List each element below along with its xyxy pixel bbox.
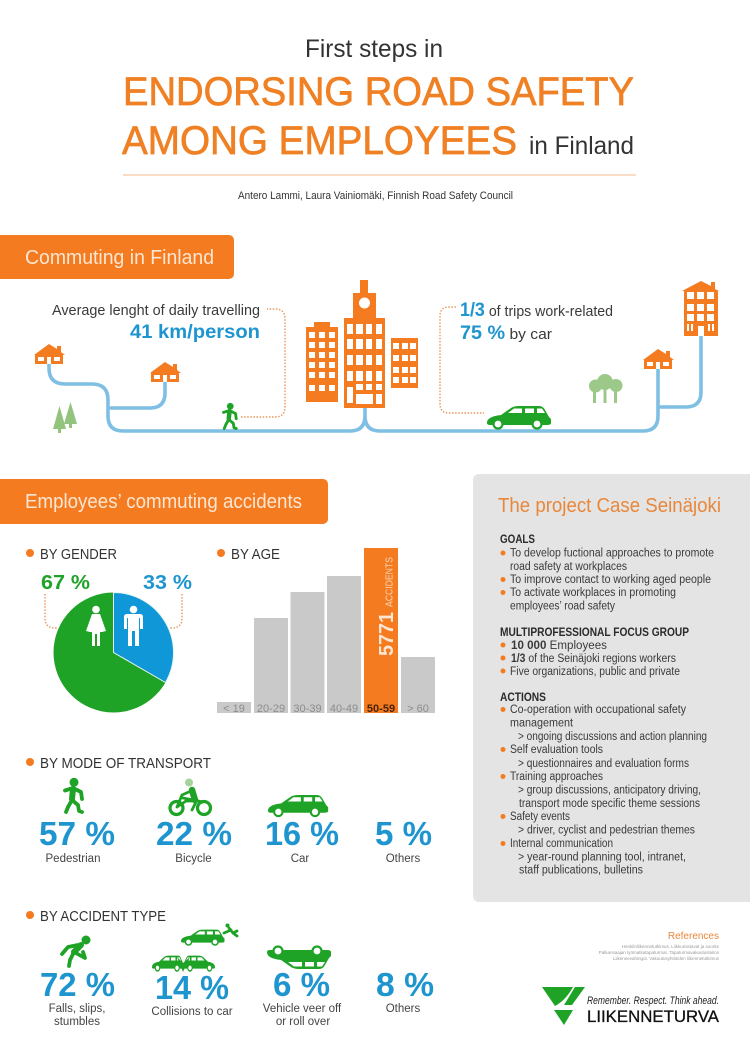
actions: > ongoing discussions and action planning (518, 731, 707, 743)
pie chart: gender (54, 592, 174, 712)
heading: by gender: BY GENDER (40, 546, 117, 563)
actions: ACTIONS (500, 692, 546, 704)
stat: falls: 72 % (40, 966, 115, 1003)
actions: management (510, 718, 574, 730)
title (122, 35, 634, 163)
icon: car on road (487, 406, 551, 428)
text: average length of daily travelling: Average lenght of daily travelling (52, 302, 260, 319)
bar chart: by age: 5771 (376, 612, 398, 656)
actions: > group discussions, anticipatory driving, (518, 784, 701, 796)
heading: by age: BY AGE (231, 546, 280, 563)
goals: To activate workplaces in promoting (510, 587, 676, 599)
stat: car: Car (291, 853, 309, 865)
stat: bicycle: 22 % (156, 815, 232, 852)
bar chart: by age: 20-29 (257, 703, 285, 715)
icon: falling person (62, 936, 90, 966)
references: Henkilöliikennetutkimus. Liikkumistavat ja suorite (622, 944, 719, 949)
bar chart: by age: ACCIDENTS (384, 557, 396, 607)
stat: falls: Falls, slips, (49, 1003, 105, 1015)
logo: Liikenneturva (542, 987, 720, 1026)
actions: Co-operation with occupational safety (510, 704, 686, 716)
gender leaders (45, 594, 182, 628)
text: trips work-related: 75 % by car (460, 323, 552, 344)
text: average length of daily travelling: 41 km/person (130, 322, 260, 343)
icon: house 1 (34, 344, 65, 364)
focus group (500, 627, 689, 678)
goals: To improve contact to working aged people (510, 574, 711, 586)
icon: house 2 (150, 362, 181, 382)
icon: city buildings (306, 280, 418, 408)
actions: > year-round planning tool, intranet, (518, 852, 686, 864)
bar chart: by age (217, 548, 435, 715)
road network (49, 334, 701, 431)
banner: employees commuting accidents: Employees’ commuting accidents (25, 491, 302, 513)
focus group: 1/3 of the Seinäjoki regions workers (511, 653, 676, 665)
banner: commuting in Finland: Commuting in Finland (25, 247, 214, 269)
references: Liikennevahingot. Vakuutusyhtiöiden liikennetutkimus (613, 956, 720, 961)
actions: transport mode specific theme sessions (519, 798, 700, 810)
bar chart: by age: 40-49 (330, 703, 358, 715)
text: trips work-related (460, 300, 613, 344)
actions: Self evaluation tools (510, 744, 603, 756)
icon: right trees (589, 374, 622, 403)
stat: collisions: Collisions to car (151, 1006, 233, 1018)
actions: Training approaches (510, 771, 603, 783)
stat: pedestrian: Pedestrian (46, 853, 100, 865)
stat: veer off: or roll over (276, 1016, 330, 1028)
goals: road safety at workplaces (510, 561, 627, 573)
icon: woman (86, 606, 106, 646)
focus group: Five organizations, public and private (510, 666, 680, 678)
references: Palkansaajan työmatkatapaturmat. Tapaturmavakuutuslaitos (599, 950, 720, 955)
title: AMONG EMPLOYEES (122, 119, 517, 163)
references: References (668, 931, 719, 942)
stat: others: 5 % (375, 815, 432, 852)
actions: > driver, cyclist and pedestrian themes (518, 824, 695, 836)
icon: head-on collision (152, 956, 215, 972)
gender percentages: 33 % (143, 572, 192, 594)
icon: pedestrian (65, 778, 82, 812)
stat: others: 8 % (376, 966, 434, 1003)
stat: others: Others (386, 853, 421, 865)
text: trips work-related: 1/3 of trips work-related (460, 300, 613, 321)
icon: right apartment building (682, 281, 719, 336)
icon: walking person (224, 403, 236, 428)
stat: collisions (151, 969, 233, 1018)
stat: veer off: 6 % (273, 966, 330, 1003)
stat: veer off (263, 966, 342, 1028)
stat: car: 16 % (265, 815, 339, 852)
dotted leader right (440, 307, 484, 413)
stat: others: Others (386, 1003, 421, 1015)
logo: Liikenneturva: LIIKENNETURVA (587, 1007, 720, 1026)
icon: bicycle (170, 778, 210, 814)
heading: by accident type: BY ACCIDENT TYPE (40, 908, 166, 925)
stat: falls: stumbles (54, 1016, 100, 1028)
goals: employees’ road safety (510, 600, 615, 612)
icon: man (124, 606, 143, 646)
actions: staff publications, bulletins (519, 864, 643, 876)
stat: bicycle: Bicycle (175, 853, 212, 865)
heading: by mode of transport: BY MODE OF TRANSPORT (40, 755, 211, 772)
icon: car hitting person (181, 924, 237, 945)
icon: left trees (53, 402, 77, 433)
goals (500, 534, 714, 612)
bar chart: by age: 50-59 (367, 703, 395, 715)
gender percentages: 67 % (41, 572, 90, 594)
stat: falls (40, 966, 115, 1028)
focus group: 10 000 Employees (511, 640, 607, 652)
bar chart: by age: < 19 (223, 703, 245, 715)
title: First steps in (305, 35, 443, 63)
banner: commuting in Finland (0, 235, 234, 279)
text: average length of daily travelling (52, 302, 260, 343)
actions: Safety events (510, 811, 570, 823)
goals: To develop fuctional approaches to promote (510, 548, 714, 560)
focus group: MULTIPROFESSIONAL FOCUS GROUP (500, 627, 689, 639)
goals: GOALS (500, 534, 535, 546)
bar chart: by age: 30-39 (293, 703, 322, 715)
icon: car (268, 795, 328, 816)
stat: pedestrian: 57 % (39, 815, 115, 852)
title: in Finland (529, 132, 634, 160)
panel title: The project Case Seinäjoki (498, 495, 721, 517)
title: ENDORSING ROAD SAFETY (123, 70, 634, 114)
panel: project case Seinäjoki (473, 474, 750, 902)
banner: employees commuting accidents (0, 479, 328, 524)
stat: veer off: Vehicle veer off (263, 1003, 342, 1015)
authors: Antero Lammi, Laura Vainiomäki, Finnish Road Safety Council (238, 190, 513, 202)
bar chart: by age: > 60 (407, 703, 429, 715)
icon: house 3 (643, 349, 674, 369)
icon: overturned car (267, 946, 331, 969)
actions: > questionnaires and evaluation forms (518, 758, 689, 770)
actions: Internal communication (510, 838, 613, 850)
stat: collisions: 14 % (155, 969, 229, 1006)
dotted leader left (241, 309, 285, 417)
references (599, 931, 720, 961)
actions (500, 692, 707, 876)
gender percentages (41, 572, 192, 594)
